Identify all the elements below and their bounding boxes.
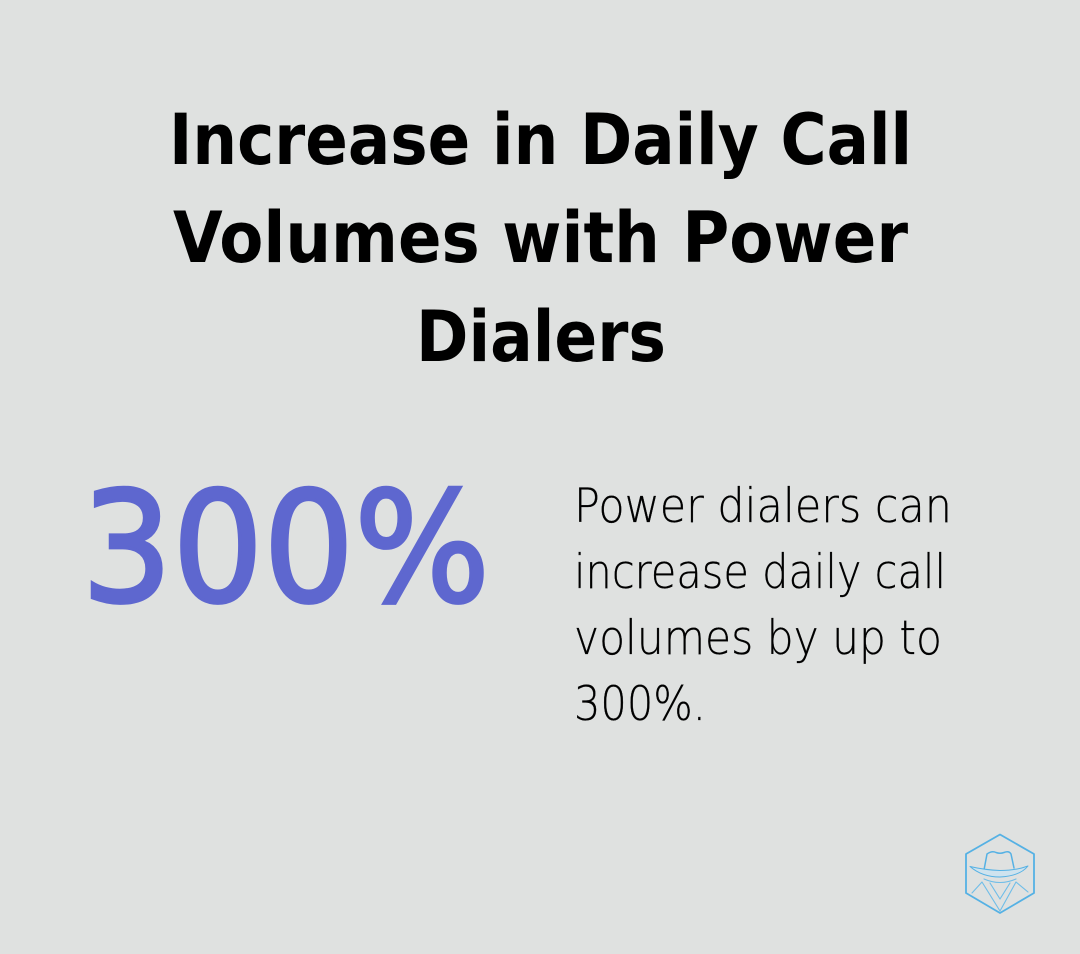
stat description: increase daily call (574, 545, 946, 600)
stat description: Power dialers can (574, 479, 952, 534)
stat description (574, 479, 952, 732)
collar (972, 879, 1028, 911)
icon: hexagon logo with hat (966, 834, 1034, 913)
stat description: volumes by up to (574, 611, 942, 666)
stat description: 300%. (574, 677, 706, 732)
title: Dialers (416, 296, 666, 378)
hat brim (970, 866, 1028, 877)
title: Increase in Daily Call (169, 99, 912, 181)
big stat: 300%: 300% (82, 460, 490, 638)
title (169, 99, 912, 378)
hexagon outline (966, 834, 1034, 913)
hat crown (984, 852, 1014, 870)
title: Volumes with Power (173, 197, 908, 279)
